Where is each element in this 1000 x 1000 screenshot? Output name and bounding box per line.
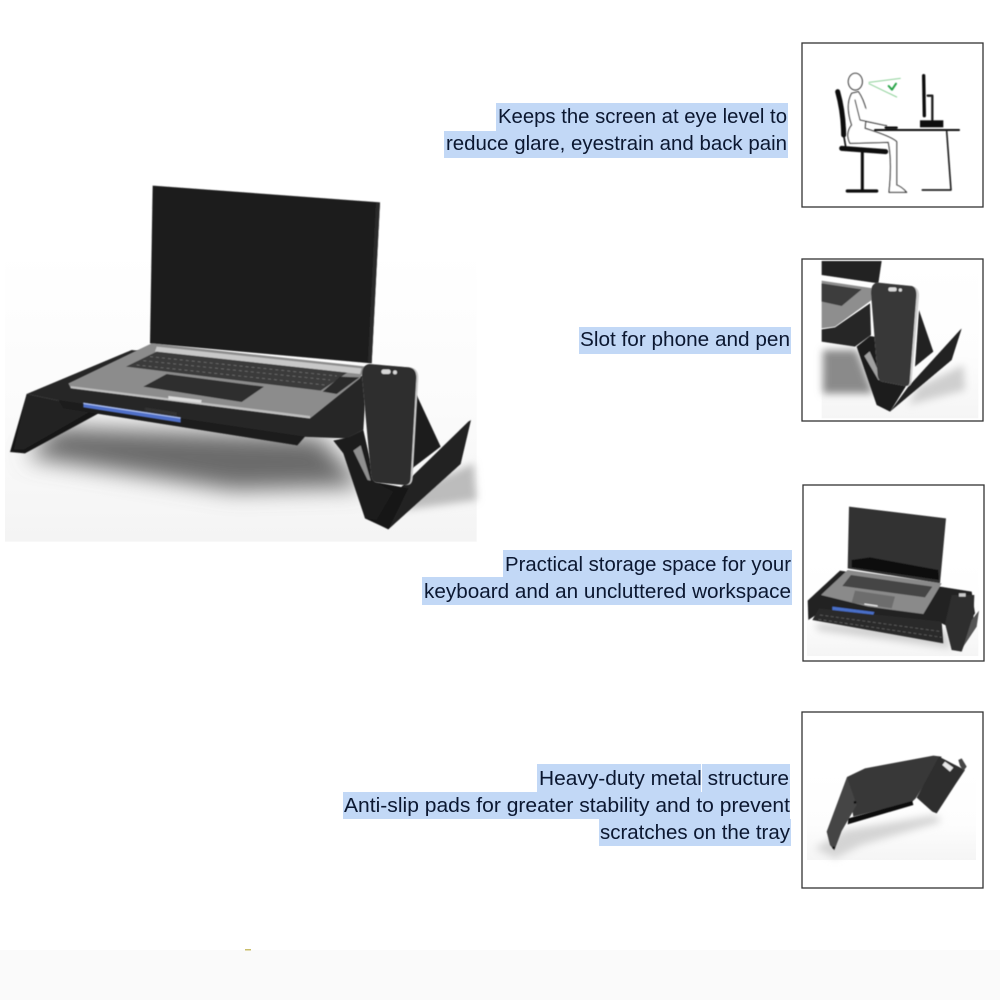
stand	[10, 350, 471, 529]
camera	[381, 369, 391, 374]
panel: ergonomic posture	[802, 43, 983, 207]
caption: eye level: Keeps the screen at eye level to	[498, 105, 787, 128]
right front leg	[333, 430, 393, 520]
phone	[871, 283, 919, 386]
keyboard	[126, 352, 347, 391]
tab	[958, 758, 967, 771]
panel: metal structure	[802, 712, 983, 888]
pen	[83, 403, 181, 423]
front lip	[58, 400, 305, 445]
caption: storage: keyboard and an uncluttered workspace	[424, 580, 791, 603]
chair	[838, 92, 886, 191]
caption: structure: Heavy-duty metal structure	[539, 767, 789, 790]
stand plate	[822, 303, 871, 347]
front notch	[168, 396, 202, 403]
laptop screen piece	[822, 261, 882, 283]
keyboard	[812, 608, 943, 643]
speaker corner	[323, 377, 359, 394]
laptop	[68, 186, 380, 419]
photo: phone in slot	[822, 261, 978, 418]
hinge	[155, 347, 362, 374]
laptop base	[821, 570, 942, 614]
caption: storage: Practical storage space for your	[505, 553, 791, 576]
tray	[377, 420, 471, 529]
pen	[832, 607, 874, 615]
laptop screen	[848, 507, 946, 583]
trackpad	[143, 374, 264, 402]
back right leg	[403, 395, 441, 470]
caption: structure: scratches on the tray	[600, 821, 791, 844]
leg	[857, 336, 905, 412]
leg slot	[353, 445, 371, 481]
anti-slip pad	[854, 801, 856, 804]
monitor and desk	[875, 76, 959, 190]
photo: stand underside	[807, 756, 976, 860]
front lip	[848, 801, 913, 824]
desk shadow	[27, 427, 477, 510]
photo: keyboard below stand	[807, 507, 979, 656]
laptop base	[68, 343, 367, 419]
left leg	[10, 394, 100, 453]
bottom band	[0, 950, 1000, 1000]
caption: eye level: reduce glare, eyestrain and back pain	[446, 132, 787, 155]
small yellow mark	[245, 949, 251, 950]
panel: phone slot detail	[802, 259, 983, 421]
tray	[890, 329, 962, 412]
caption: eye level	[444, 103, 788, 158]
caption: slot: Slot for phone and pen	[580, 328, 790, 351]
back leg	[915, 310, 933, 367]
laptop base piece	[822, 281, 873, 328]
sight lines	[869, 78, 900, 97]
main plate	[847, 756, 942, 817]
caption: structure	[343, 764, 791, 846]
panel: keyboard storage	[803, 485, 984, 661]
photo background	[5, 250, 477, 542]
right wing	[917, 757, 965, 813]
top plate	[27, 350, 367, 438]
main photo: laptop on stand	[5, 186, 477, 542]
icon: seated person at desk	[838, 73, 959, 192]
person	[848, 73, 907, 192]
phone	[362, 364, 418, 485]
tray tip	[963, 611, 979, 647]
left leg	[827, 777, 857, 850]
caption: structure: Anti-slip pads for greater stability and to prevent	[344, 794, 790, 817]
caption: storage	[422, 550, 792, 605]
laptop screen	[150, 186, 380, 363]
phone	[945, 595, 974, 652]
stand	[808, 571, 975, 633]
check mark	[889, 84, 896, 90]
